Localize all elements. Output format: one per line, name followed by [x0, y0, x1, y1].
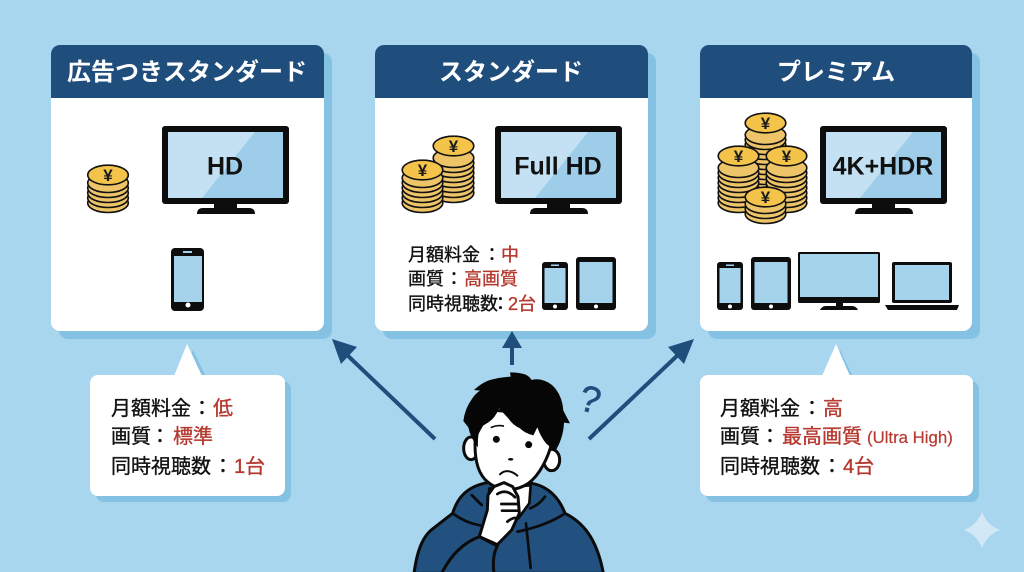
text: ad-supported plan details	[111, 397, 265, 478]
text: premium plan details: ：	[822, 456, 842, 478]
panel: premium	[700, 45, 980, 339]
text: standard plan details	[408, 245, 536, 314]
icon: coin pile: ¥	[761, 188, 771, 207]
icon: four devices	[717, 252, 959, 310]
heading: premium: プレミアム	[777, 59, 895, 86]
icon: HD TV: HD	[207, 152, 243, 180]
text: standard plan details: 月額料金	[408, 245, 480, 265]
text: premium plan details	[720, 397, 953, 478]
text: premium plan details: 画質	[720, 426, 760, 448]
text: standard plan details: 2台	[508, 294, 536, 314]
text: standard plan details: 画質	[408, 269, 444, 289]
text: premium plan details: ：	[802, 398, 822, 420]
callout: ad-supported standard	[90, 344, 291, 502]
text: ad-supported plan details: 月額料金	[111, 398, 191, 420]
icon: HD TV	[162, 126, 289, 214]
icon: coin stack	[88, 165, 128, 212]
icon: question mark: ?	[575, 377, 605, 422]
icon: coin stacks: ¥	[418, 161, 428, 180]
icon: coin pile	[718, 113, 807, 224]
text: standard plan details: ：	[445, 269, 463, 289]
heading: standard: スタンダード	[439, 58, 583, 86]
panel: ad-supported standard	[51, 45, 332, 339]
text: ad-supported plan details: 同時視聴数	[111, 456, 211, 478]
icon: sparkle	[964, 512, 1000, 548]
text: ad-supported plan details: 画質	[111, 426, 151, 448]
text: standard plan details: 同時視聴数	[408, 294, 498, 314]
text: standard plan details: 中	[501, 245, 519, 265]
arrow: to premium	[589, 339, 694, 439]
icon: 4K HDR TV	[820, 126, 947, 214]
text: premium plan details: 同時視聴数	[720, 456, 820, 478]
text: premium plan details: 月額料金	[720, 398, 800, 420]
text: ad-supported plan details: ：	[213, 456, 233, 478]
icon: 4K HDR TV: 4K+HDR	[833, 152, 933, 180]
icon: phone and tablet	[542, 257, 616, 310]
icon: coin pile: ¥	[761, 114, 771, 133]
icon: coin stacks: ¥	[449, 137, 459, 156]
panel: standard	[375, 45, 656, 339]
icon: Full HD TV	[495, 126, 622, 214]
icon: coin pile: ¥	[734, 147, 744, 166]
icon: coin stacks	[402, 136, 474, 212]
text: premium plan details: ：	[760, 426, 780, 448]
text: standard plan details: ：	[492, 294, 510, 314]
icon: Full HD TV: Full HD	[514, 152, 602, 180]
illustration: thinking person	[414, 372, 603, 572]
arrow: to standard	[502, 331, 522, 365]
text: premium plan details: 最高画質	[782, 425, 862, 448]
text: premium plan details: (Ultra High)	[867, 428, 953, 447]
icon: coin pile: ¥	[782, 147, 792, 166]
text: ad-supported plan details: 1台	[234, 455, 265, 478]
heading: ad-supported standard: 広告つきスタンダード	[67, 58, 307, 86]
text: ad-supported plan details: 標準	[173, 425, 213, 448]
callout: premium	[700, 344, 979, 502]
text: standard plan details: 高画質	[464, 269, 518, 289]
text: ad-supported plan details: 低	[213, 397, 233, 420]
text: ad-supported plan details: ：	[150, 426, 170, 448]
icon: smartphone	[171, 248, 204, 311]
text: premium plan details: 高	[823, 397, 843, 420]
text: premium plan details: 4台	[843, 455, 874, 478]
text: ad-supported plan details: ：	[192, 398, 212, 420]
arrow: to ad-supported standard	[332, 339, 435, 439]
icon: coin stack: ¥	[103, 166, 113, 185]
text: standard plan details: ：	[483, 245, 501, 265]
